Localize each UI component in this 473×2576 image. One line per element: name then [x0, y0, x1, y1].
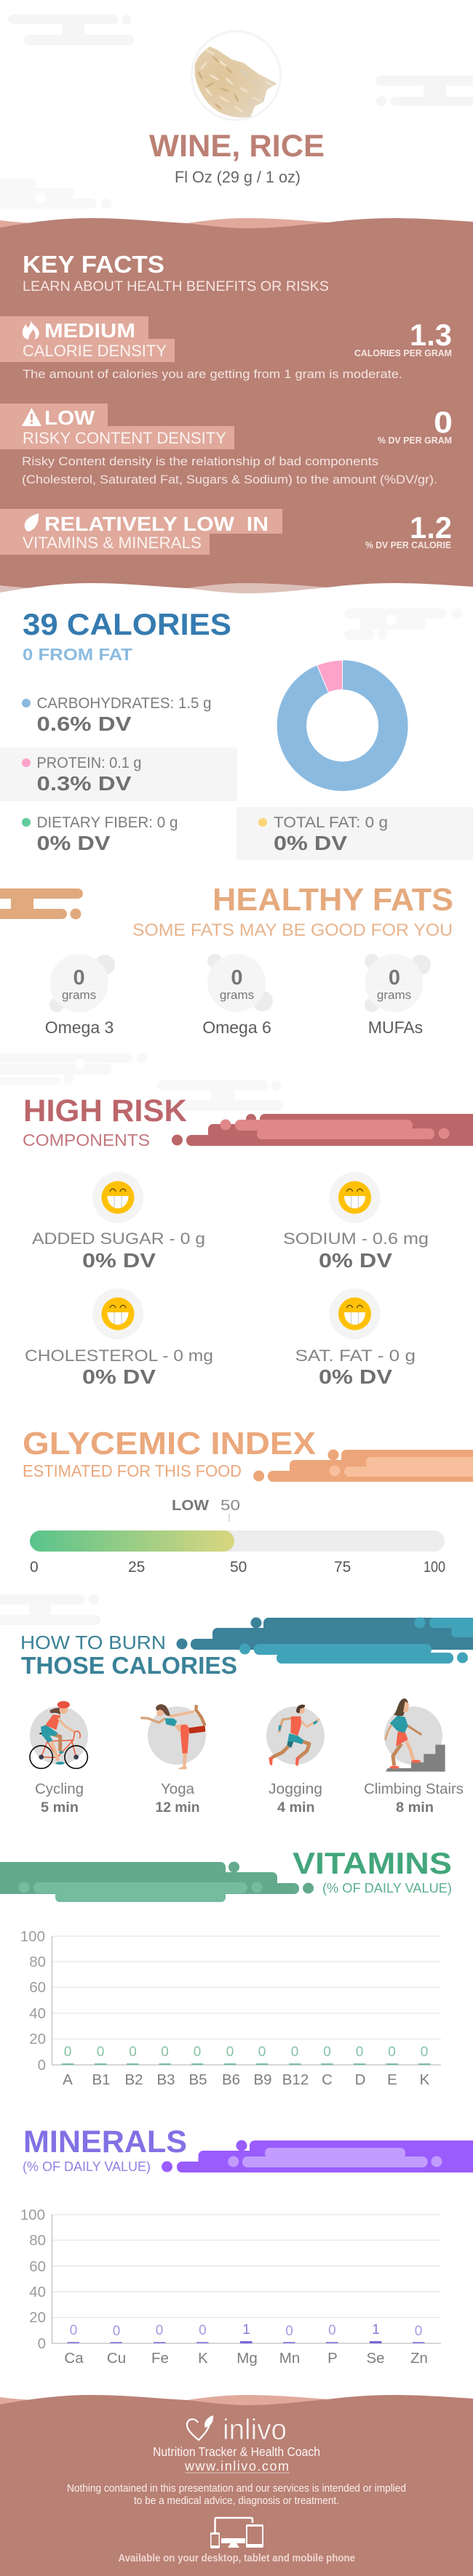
bar chart: minerals: 20: [29, 2309, 46, 2326]
activity: cycling: [30, 1701, 88, 1815]
serving size: Fl Oz (29 g / 1 oz): [175, 168, 301, 186]
activity: climbing stairs: [364, 1698, 464, 1815]
bar chart: vitamins: 0: [64, 2045, 71, 2060]
bar chart: minerals: P: [327, 2350, 338, 2367]
disclaimer: Nothing contained in this presentation and our services is intended or implied: [67, 2483, 406, 2495]
item: added sugar: [32, 1172, 205, 1272]
bar chart: minerals: 100: [20, 2207, 45, 2223]
tagline: Nutrition Tracker & Health Coach: [153, 2444, 320, 2459]
fact: risky content density: [0, 404, 453, 486]
disclaimer: [67, 2483, 406, 2507]
bar chart: vitamins: E: [387, 2071, 397, 2088]
logo: inlivo: inlivo: [223, 2414, 287, 2446]
website link: www.inlivo.com: [184, 2459, 289, 2473]
icon: jogger: [266, 1705, 325, 1766]
donut chart: [292, 660, 393, 777]
legend: total fat: [236, 807, 473, 860]
bar chart: minerals: 0: [199, 2323, 207, 2338]
stat: omega 3: 0: [73, 966, 85, 990]
heading: those calories: THOSE CALORIES: [21, 1652, 237, 1679]
subheading: components: COMPONENTS: [23, 1131, 150, 1149]
bar chart: vitamins: 0: [291, 2045, 298, 2060]
logo: inlivo: [187, 2414, 287, 2446]
bar chart: vitamins: B5: [188, 2071, 207, 2088]
value: 1.2: 1.2: [410, 510, 452, 545]
stat: mufas: MUFAs: [368, 1018, 423, 1037]
bar chart: minerals: 40: [29, 2284, 46, 2300]
bar chart: minerals: 0: [156, 2323, 163, 2338]
decorative band: minerals: [162, 2140, 473, 2172]
bar chart: vitamins: 0: [258, 2045, 266, 2060]
gauge: LOW: [172, 1498, 209, 1514]
panel: minerals: [20, 2124, 473, 2367]
bar chart: minerals: Mg: [236, 2350, 258, 2367]
item: added sugar: ADDED SUGAR - 0 g: [32, 1229, 205, 1248]
heading: glycemic index: GLYCEMIC INDEX: [23, 1426, 316, 1461]
availability note: Available on your desktop, tablet and mobile phone: [118, 2552, 355, 2564]
activity: jogging: 4 min: [277, 1800, 314, 1815]
value: 0: 0: [434, 405, 453, 439]
heading: key facts: KEY FACTS: [23, 251, 164, 278]
stat: omega 3: [45, 954, 115, 1037]
bar chart: vitamins: B2: [124, 2071, 143, 2088]
gauge: 100: [424, 1559, 445, 1576]
stat: omega 3: Omega 3: [45, 1018, 114, 1037]
description: [22, 454, 437, 486]
description: Risky Content density is the relationship of bad components: [22, 454, 378, 468]
gauge: [30, 1498, 445, 1576]
panel: high risk components: [0, 1053, 473, 1388]
bar chart: minerals: 1: [242, 2322, 250, 2338]
activity: yoga: [140, 1704, 206, 1815]
bar chart: vitamins: 0: [388, 2045, 396, 2060]
gauge: 0: [30, 1559, 39, 1576]
bar chart: vitamins: 0: [161, 2045, 169, 2060]
bar chart: minerals: 80: [29, 2232, 46, 2249]
legend: carbohydrates: [22, 695, 211, 735]
item: added sugar: 0% DV: [82, 1249, 156, 1272]
activity: climbing stairs: 8 min: [396, 1800, 434, 1815]
activity: cycling: 5 min: [41, 1800, 79, 1815]
disclaimer: to be a medical advice, diagnosis or treatment.: [134, 2495, 339, 2507]
panel: glycemic index: [23, 1426, 473, 1576]
label: low: LOW: [44, 406, 95, 429]
item: cholesterol: [25, 1288, 213, 1388]
legend: total fat: 0% DV: [274, 832, 347, 854]
bar chart: vitamins: 0: [129, 2045, 137, 2060]
icon: flame: [23, 320, 39, 340]
bar chart: minerals: 0: [113, 2324, 120, 2339]
bar chart: vitamins: C: [322, 2071, 333, 2088]
subheading: ESTIMATED FOR THIS FOOD: [23, 1461, 242, 1480]
label: medium: MEDIUM: [44, 319, 135, 342]
unit: CALORIES PER GRAM: [354, 348, 452, 358]
bar chart: minerals: K: [198, 2350, 208, 2367]
bar chart: minerals: 0: [328, 2323, 336, 2338]
stat: mufas: [365, 954, 431, 1037]
legend: protein: 0.3% DV: [36, 772, 132, 795]
bar chart: vitamins: K: [420, 2071, 430, 2088]
heading: how to burn: HOW TO BURN: [20, 1632, 166, 1653]
icon: yoga pose: [140, 1704, 206, 1769]
bar chart: vitamins: 100: [20, 1928, 45, 1945]
panel: key facts: [0, 218, 473, 612]
heading: minerals: MINERALS: [23, 2124, 187, 2159]
bar chart: vitamins: 0: [323, 2045, 331, 2060]
item: cholesterol: 0% DV: [82, 1365, 156, 1388]
bar chart: vitamins: B6: [222, 2071, 240, 2088]
subheading: (% OF DAILY VALUE): [23, 2159, 151, 2174]
bar chart: vitamins: 80: [29, 1954, 46, 1970]
heading: calories: 39 CALORIES: [23, 607, 231, 641]
heading: high risk: HIGH RISK: [23, 1094, 187, 1128]
label: risky content density: RISKY CONTENT DENSITY: [23, 429, 226, 447]
activity: jogging: Jogging: [269, 1781, 322, 1797]
bar chart: minerals: Cu: [107, 2350, 126, 2367]
bar chart: vitamins: 0: [97, 2045, 104, 2060]
label: relatively low in: RELATIVELY LOW IN: [44, 513, 269, 535]
bar chart: vitamins: 40: [29, 2005, 46, 2022]
food title: WINE, RICE: [149, 129, 325, 164]
unit: % DV PER GRAM: [378, 436, 452, 446]
bar chart: minerals: Se: [366, 2350, 385, 2367]
stat: omega 6: grams: [220, 988, 254, 1002]
bar chart: minerals: 1: [372, 2322, 380, 2338]
item: saturated fat: SAT. FAT - 0 g: [295, 1347, 416, 1365]
bar chart: vitamins: D: [355, 2071, 365, 2088]
decorative band: vitamins: [0, 1861, 314, 1902]
legend: carbohydrates: 0.6% DV: [36, 713, 132, 735]
decorative band: burn: [176, 1617, 473, 1664]
icon: cyclist: [30, 1701, 88, 1768]
subheading: SOME FATS MAY BE GOOD FOR YOU: [132, 920, 453, 940]
header: [0, 15, 473, 209]
stat: omega 3: grams: [62, 988, 96, 1002]
icon: warning: [22, 408, 41, 426]
legend: carbohydrates: CARBOHYDRATES: 1.5 g: [36, 695, 211, 712]
stat: omega 6: [202, 954, 273, 1037]
bar chart: vitamins: [20, 1928, 441, 2088]
bar chart: vitamins: 0: [226, 2045, 234, 2060]
item: saturated fat: 0% DV: [319, 1365, 392, 1388]
bar chart: minerals: Zn: [410, 2350, 428, 2367]
legend: total fat: TOTAL FAT: 0 g: [274, 814, 388, 831]
stat: omega 6: Omega 6: [202, 1018, 271, 1037]
bar chart: vitamins: B1: [92, 2071, 111, 2088]
item: saturated fat: [295, 1288, 416, 1388]
gauge: 50: [220, 1498, 240, 1514]
activity: yoga: Yoga: [161, 1781, 195, 1797]
activity: cycling: Cycling: [35, 1781, 84, 1797]
unit: % DV PER CALORIE: [365, 540, 451, 550]
bar chart: minerals: 60: [29, 2258, 46, 2275]
label: vitamins and minerals: VITAMINS & MINERALS: [23, 534, 202, 552]
label: calorie density: CALORIE DENSITY: [23, 342, 167, 360]
icon: leaf: [25, 513, 39, 531]
bar chart: vitamins: 60: [29, 1979, 46, 1996]
fact: vitamins and minerals: [0, 509, 452, 555]
item: cholesterol: CHOLESTEROL - 0 mg: [25, 1347, 213, 1365]
activity: jogging: [266, 1705, 325, 1815]
heading: vitamins: VITAMINS: [293, 1846, 452, 1880]
bar chart: vitamins: B3: [156, 2071, 175, 2088]
legend: protein: PROTEIN: 0.1 g: [36, 755, 141, 771]
stat: omega 6: 0: [231, 966, 243, 990]
decorative band: glycemic: [253, 1450, 473, 1482]
bar chart: minerals: Ca: [64, 2350, 84, 2367]
item: sodium: [283, 1172, 429, 1272]
item: sodium: SODIUM - 0.6 mg: [283, 1229, 429, 1248]
item: sodium: 0% DV: [319, 1249, 392, 1272]
gauge: 50: [230, 1559, 247, 1576]
subheading: from fat: 0 FROM FAT: [23, 645, 132, 664]
stat: mufas: grams: [377, 988, 411, 1002]
legend: dietary fiber: [22, 814, 178, 854]
activity: climbing stairs: Climbing Stairs: [364, 1781, 464, 1797]
legend: dietary fiber: DIETARY FIBER: 0 g: [36, 814, 178, 831]
bar chart: minerals: 0: [70, 2323, 77, 2338]
bar chart: minerals: [20, 2207, 441, 2367]
bar chart: vitamins: B12: [282, 2071, 309, 2088]
heading: healthy fats: HEALTHY FATS: [212, 882, 453, 918]
bar chart: minerals: 0: [38, 2335, 46, 2352]
subheading: (% OF DAILY VALUE): [322, 1880, 452, 1895]
panel: how to burn calories: [0, 1594, 473, 1815]
description: (Cholesterol, Saturated Fat, Sugars & Sodium) to the amount (%DV/gr).: [22, 473, 437, 486]
bar chart: vitamins: A: [63, 2071, 73, 2088]
food image: rice: [192, 31, 281, 120]
bar chart: minerals: 0: [415, 2324, 422, 2339]
description: The amount of calories you are getting from 1 gram is moderate.: [23, 367, 402, 381]
legend: dietary fiber: 0% DV: [36, 832, 111, 854]
gauge: 75: [334, 1559, 351, 1576]
value: 1.3: 1.3: [410, 318, 452, 352]
gauge: 25: [128, 1559, 145, 1576]
panel: calories: [0, 607, 473, 860]
bar chart: vitamins: 0: [356, 2045, 363, 2060]
subheading: LEARN ABOUT HEALTH BENEFITS OR RISKS: [23, 278, 329, 294]
panel: vitamins: [0, 1846, 452, 2088]
panel: healthy fats: [0, 882, 453, 1037]
footer: [0, 2395, 473, 2576]
bar chart: vitamins: 0: [421, 2045, 428, 2060]
bar chart: minerals: Fe: [151, 2350, 169, 2367]
icon: stair climber: [384, 1698, 445, 1772]
bar chart: vitamins: 20: [29, 2031, 46, 2047]
decorative band: high risk: [172, 1114, 473, 1146]
bar chart: minerals: 0: [285, 2324, 293, 2339]
fact: calorie density: [0, 316, 452, 381]
bar chart: vitamins: B9: [253, 2071, 272, 2088]
legend: protein: [0, 747, 237, 801]
bar chart: minerals: Mn: [279, 2350, 300, 2367]
activity: yoga: 12 min: [156, 1800, 199, 1815]
icon: devices: [210, 2518, 263, 2548]
bar chart: vitamins: 0: [38, 2057, 46, 2074]
bar chart: vitamins: 0: [194, 2045, 201, 2060]
stat: mufas: 0: [389, 966, 400, 990]
